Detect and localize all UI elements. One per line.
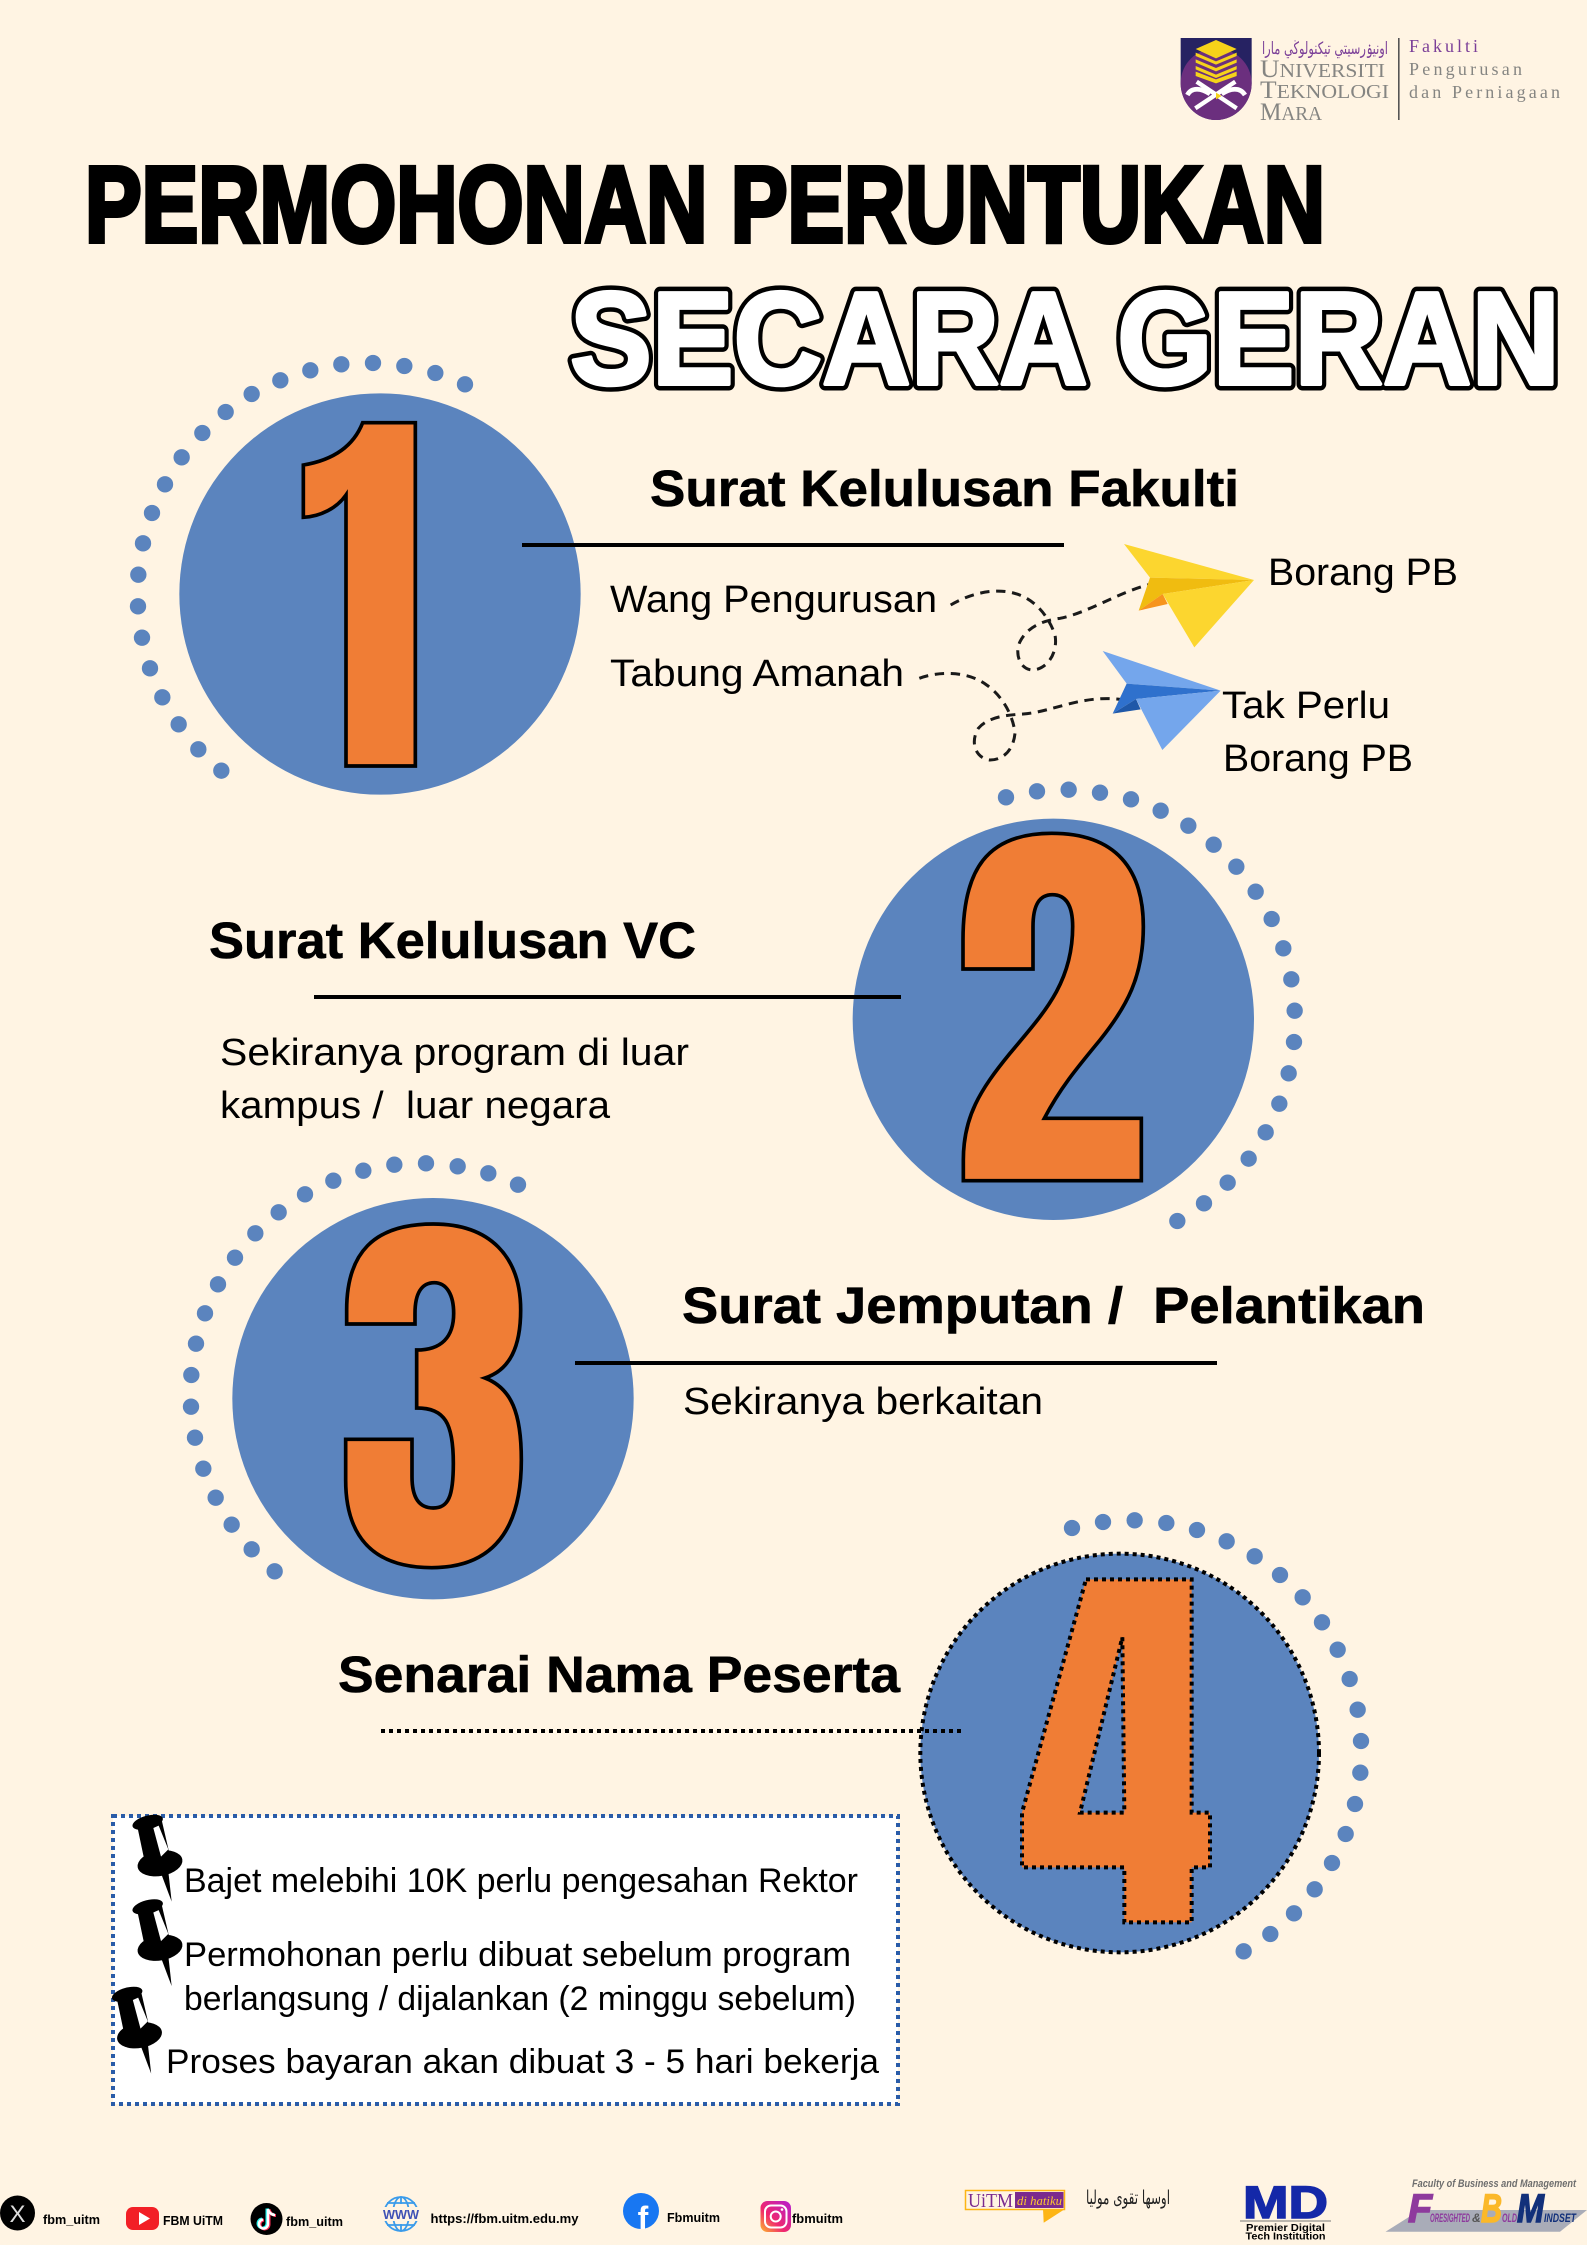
text: Borang PB: Borang PB bbox=[1268, 552, 1458, 594]
logo: UiTM Fakulti Pengurusan dan Perniagaan: Pengurusan bbox=[1409, 59, 1522, 79]
numeral 4 bbox=[1022, 1579, 1210, 1922]
footer: UiTM di hatiku badge: UiTM bbox=[968, 2190, 1013, 2212]
label: Facebook: Fbmuitm bbox=[667, 2210, 720, 2225]
label: TikTok: fbm_uitm bbox=[286, 2214, 343, 2229]
icon: Facebook bbox=[623, 2193, 659, 2236]
note: apply before the programme bbox=[184, 1936, 856, 2018]
footer: FBM Foresighted and Bold Mindset logo: ORESIGHTED bbox=[1430, 2211, 1470, 2225]
footer: MD Premier Digital logo bbox=[1240, 2177, 1331, 2242]
dots arc 2 bbox=[998, 781, 1303, 1229]
Jawi university name: اونيۏرسيتي تيكنولوڬي مارا bbox=[1262, 39, 1388, 59]
footer: FBM Foresighted and Bold Mindset logo: M bbox=[1517, 2187, 1545, 2231]
numeral 1 bbox=[303, 423, 415, 766]
footer: MD Premier Digital logo: Premier Digital bbox=[1246, 2223, 1325, 2234]
step 3 panel bbox=[183, 1155, 1425, 1599]
text: Sekiranya berkaitan: Sekiranya berkaitan bbox=[683, 1381, 1043, 1423]
footer: FBM Foresighted and Bold Mindset logo bbox=[1386, 2178, 1587, 2232]
footer: FBM Foresighted and Bold Mindset logo: & bbox=[1472, 2211, 1481, 2225]
icon: blue paper plane bbox=[1103, 651, 1221, 750]
footer: Jawi motto: اوسها تقوى موليا bbox=[1086, 2187, 1170, 2209]
note: budget: Bajet melebihi 10K perlu pengesahan Rektor bbox=[184, 1862, 858, 1900]
label: YouTube: FBM UiTM bbox=[163, 2213, 223, 2228]
icon: Facebook: f bbox=[638, 2200, 649, 2236]
step 1 panel bbox=[130, 355, 1458, 795]
footer: MD Premier Digital logo: MD bbox=[1243, 2177, 1328, 2228]
logo: UiTM Fakulti Pengurusan dan Perniagaan: MARA bbox=[1260, 99, 1323, 126]
text: program di luar kampus: kampus / luar negara bbox=[220, 1085, 611, 1127]
dots arc 3 bbox=[183, 1155, 526, 1579]
arrows: dashed flight paths bbox=[919, 584, 1150, 760]
footer: MD Premier Digital logo: Tech Institution bbox=[1246, 2232, 1326, 2242]
logo: UiTM Fakulti Pengurusan dan Perniagaan: dan Perniagaan bbox=[1409, 82, 1560, 102]
numeral 3 bbox=[346, 1224, 521, 1568]
icon: X: X bbox=[9, 2201, 26, 2228]
text: Wang Pengurusan: Wang Pengurusan bbox=[610, 579, 937, 621]
footer: UiTM di hatiku badge: di hatiku bbox=[1017, 2193, 1062, 2208]
icon: UiTM shield bbox=[1181, 38, 1252, 120]
university name: UNIVERSITI bbox=[1260, 56, 1385, 83]
label: Instagram: fbmuitm bbox=[792, 2211, 843, 2226]
icon: website globe: WWW bbox=[383, 2207, 420, 2222]
step 4 panel bbox=[338, 1512, 1369, 1959]
heading: Surat Kelulusan VC: Surat Kelulusan VC bbox=[209, 912, 696, 969]
logo: UiTM Fakulti Pengurusan dan Perniagaan: TEKNOLOGI bbox=[1260, 77, 1389, 104]
heading: Surat Kelulusan Fakulti: Surat Kelulusan Fakulti bbox=[650, 460, 1239, 517]
text: program di luar kampus: Sekiranya program di luar bbox=[220, 1032, 689, 1074]
label: website: https://fbm.uitm.edu.my bbox=[430, 2211, 579, 2226]
icon: YouTube bbox=[126, 2207, 159, 2230]
step 2 panel bbox=[209, 781, 1303, 1229]
footer: UiTM di hatiku badge bbox=[966, 2190, 1065, 2223]
logo: UiTM Fakulti Pengurusan dan Perniagaan bbox=[1181, 36, 1560, 126]
icon: push pin 2 bbox=[131, 1896, 185, 1986]
icon: yellow paper plane bbox=[1124, 544, 1254, 647]
label: X handle: fbm_uitm bbox=[43, 2212, 100, 2227]
circle 3 with number bbox=[183, 1155, 634, 1599]
footer: social links bbox=[0, 2193, 843, 2236]
circle 1 with number bbox=[130, 355, 581, 795]
note: apply before the programme: berlangsung / dijalankan (2 minggu sebelum) bbox=[184, 1980, 856, 2018]
text: Tak Perlu Borang PB: Borang PB bbox=[1223, 738, 1413, 780]
circle 4 with number bbox=[920, 1512, 1369, 1959]
note: apply before the programme: Permohonan perlu dibuat sebelum program bbox=[184, 1936, 851, 1974]
numeral 2 bbox=[963, 833, 1143, 1181]
footer: FBM Foresighted and Bold Mindset logo: F bbox=[1408, 2187, 1434, 2231]
circle 2 with number bbox=[853, 781, 1303, 1229]
heading: Surat Jemputan / Pelantikan: Surat Jemputan / Pelantikan bbox=[682, 1277, 1425, 1334]
icon: push pin 3 bbox=[110, 1984, 164, 2074]
text: Tak Perlu Borang PB: Tak Perlu bbox=[1222, 685, 1390, 727]
faculty name: Fakulti bbox=[1409, 36, 1478, 56]
text: Tabung Amanah: Tabung Amanah bbox=[610, 653, 904, 695]
footer: FBM Foresighted and Bold Mindset logo: INDSET bbox=[1544, 2211, 1577, 2225]
footer: FBM Foresighted and Bold Mindset logo: B bbox=[1481, 2187, 1502, 2231]
icon: website globe bbox=[383, 2197, 420, 2231]
icon: push pin 1 bbox=[131, 1812, 185, 1902]
icon: X bbox=[0, 2196, 35, 2230]
footer: FBM Foresighted and Bold Mindset logo: OLD bbox=[1502, 2211, 1517, 2225]
dots arc 1 bbox=[130, 355, 473, 779]
icon: Instagram bbox=[760, 2201, 791, 2232]
heading: Senarai Nama Peserta: Senarai Nama Peserta bbox=[338, 1646, 901, 1703]
notes box bbox=[110, 1812, 898, 2104]
icon: TikTok bbox=[250, 2203, 282, 2235]
text: program di luar kampus bbox=[220, 1032, 689, 1127]
text: Tak Perlu Borang PB bbox=[1222, 685, 1413, 780]
dots arc 4 bbox=[1064, 1512, 1369, 1959]
note: payment: Proses bayaran akan dibuat 3 - 5 hari bekerja bbox=[166, 2043, 879, 2081]
